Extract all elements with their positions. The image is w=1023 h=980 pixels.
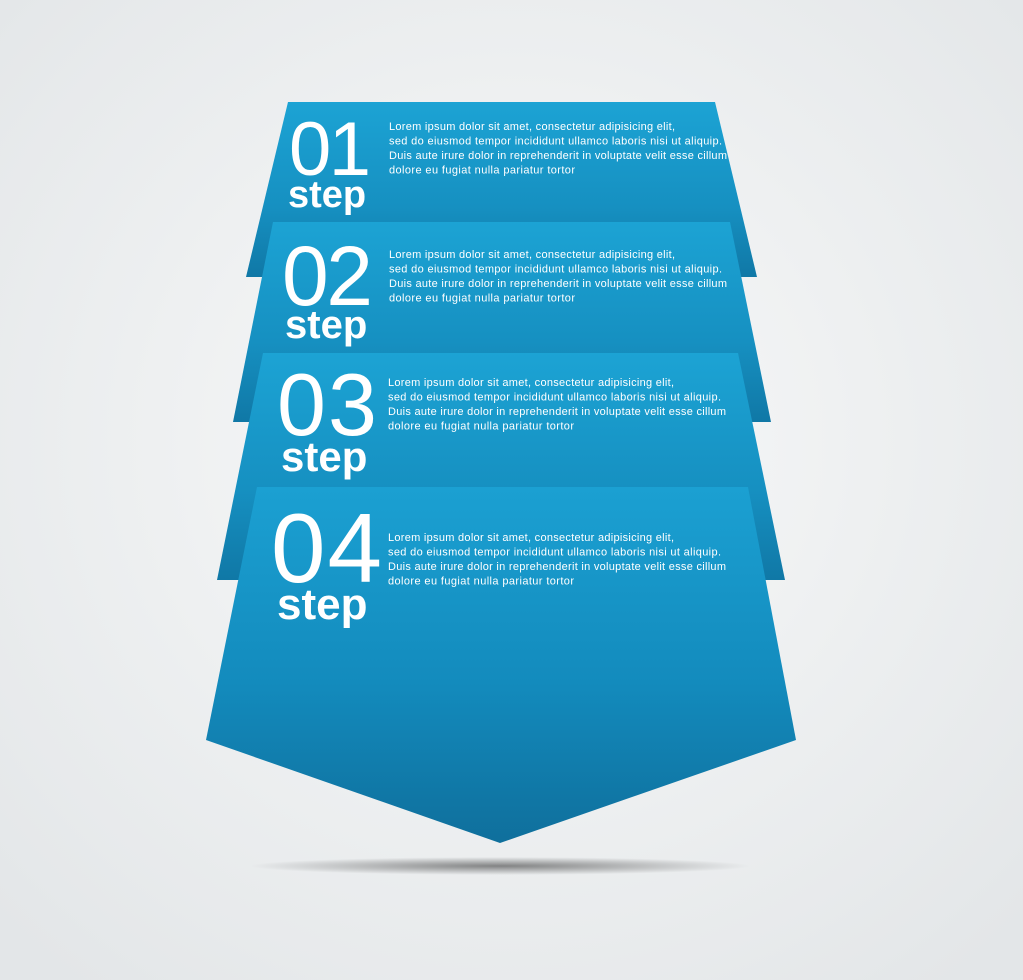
band 2 (233, 222, 771, 422)
step 04 text: dolore eu fugiat nulla pariatur tortor (388, 576, 574, 588)
step 01 number: 01 (289, 107, 371, 192)
step 03 text: Lorem ipsum dolor sit amet, consectetur adipisicing elit, (388, 377, 674, 389)
step 01 text: Lorem ipsum dolor sit amet, consectetur adipisicing elit, (389, 121, 675, 133)
step 02 label: step (285, 303, 367, 347)
step 04 number: 04 (271, 493, 382, 603)
step 04 text: Lorem ipsum dolor sit amet, consectetur adipisicing elit, (388, 532, 674, 544)
step 02 text: Duis aute irure dolor in reprehenderit in voluptate velit esse cillum (389, 278, 727, 290)
step 02 text: Lorem ipsum dolor sit amet, consectetur adipisicing elit, (389, 249, 675, 261)
band 3 (217, 353, 785, 580)
step 03 text: dolore eu fugiat nulla pariatur tortor (388, 420, 574, 432)
step 03 text: sed do eiusmod tempor incididunt ullamco laboris nisi ut aliquip. (388, 392, 721, 404)
step 02 number: 02 (282, 229, 373, 323)
band 4 arrow (206, 487, 796, 843)
step 04 label: step (277, 580, 367, 629)
step 03 text: Duis aute irure dolor in reprehenderit in voluptate velit esse cillum (388, 406, 726, 418)
band 1 (246, 102, 757, 277)
step 01 text: dolore eu fugiat nulla pariatur tortor (389, 164, 575, 176)
shadow under arrow (250, 857, 750, 875)
step 01 text: sed do eiusmod tempor incididunt ullamco laboris nisi ut aliquip. (389, 136, 722, 148)
step 04 text: sed do eiusmod tempor incididunt ullamco laboris nisi ut aliquip. (388, 546, 721, 558)
step 02 text: dolore eu fugiat nulla pariatur tortor (389, 292, 575, 304)
step 03 number: 03 (277, 355, 377, 454)
step 03 label: step (281, 433, 367, 480)
step 01 label: step (288, 174, 366, 216)
step 02 text: sed do eiusmod tempor incididunt ullamco laboris nisi ut aliquip. (389, 264, 722, 276)
step 01 text: Duis aute irure dolor in reprehenderit in voluptate velit esse cillum (389, 150, 727, 162)
step 04 text: Duis aute irure dolor in reprehenderit in voluptate velit esse cillum (388, 561, 726, 573)
